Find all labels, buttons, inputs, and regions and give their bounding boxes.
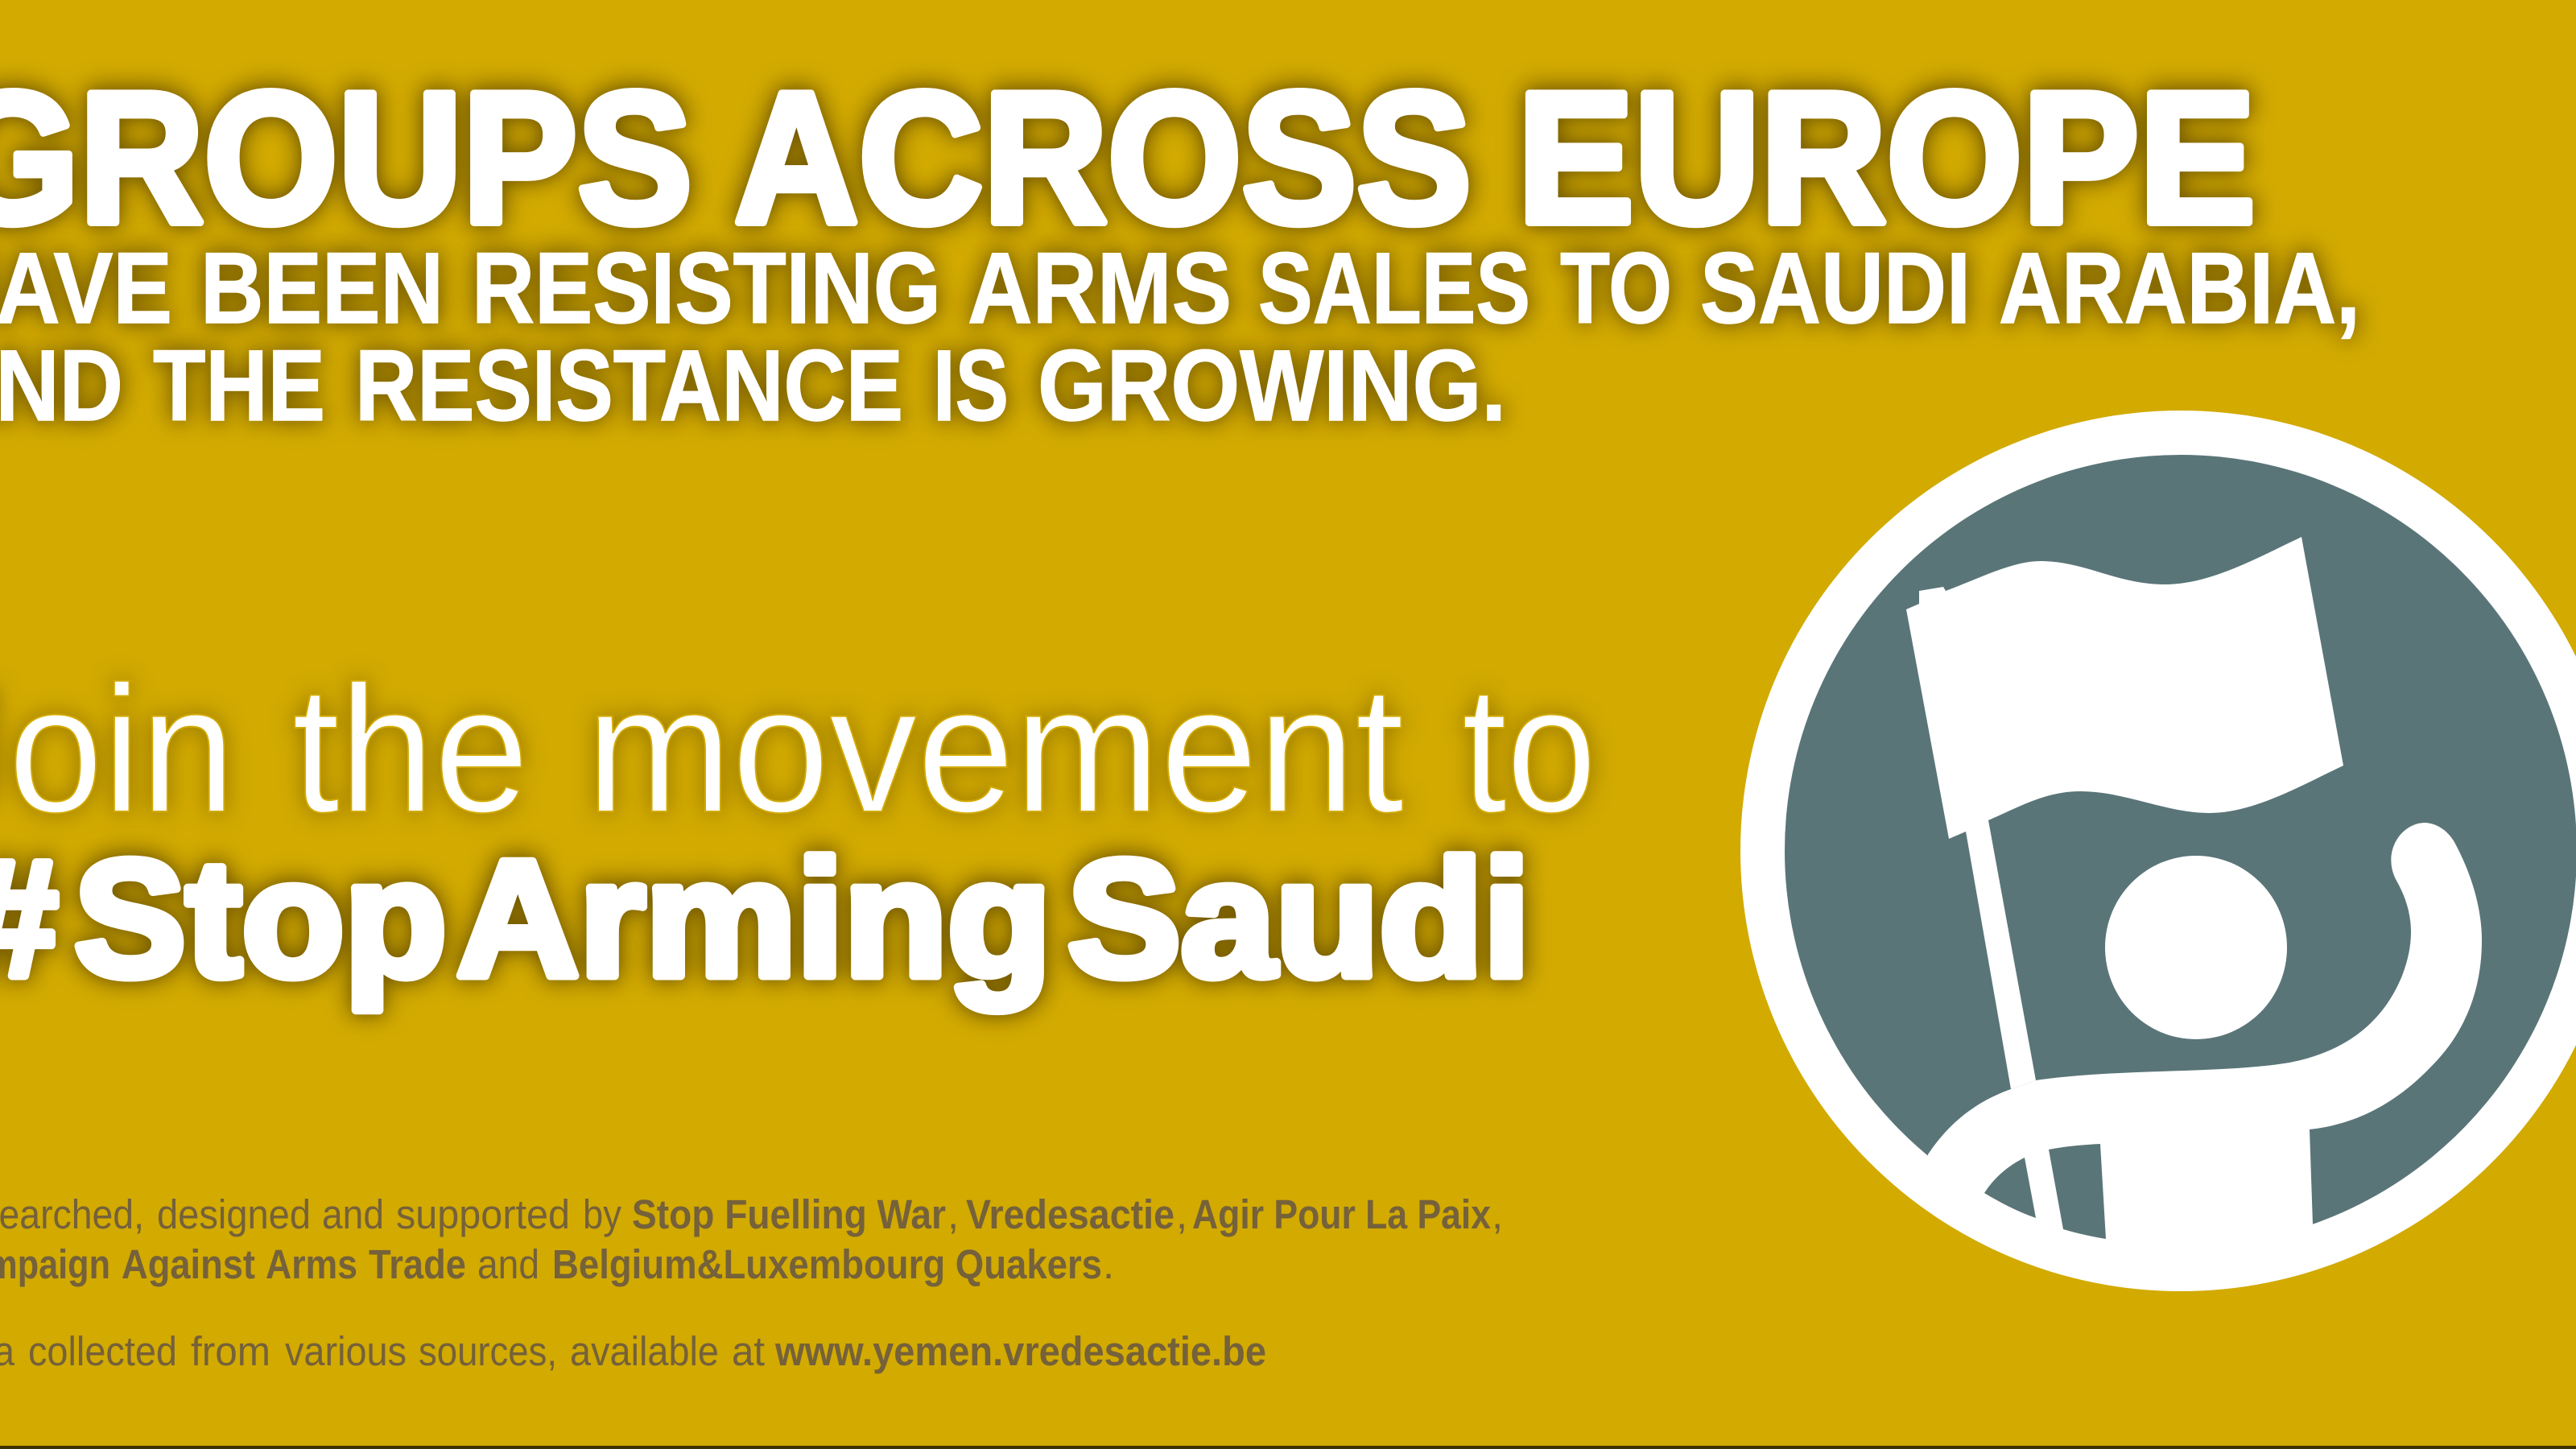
subtitle: resisting arms sales: SAUDI — [1700, 233, 1971, 345]
credits text: Against — [122, 1241, 255, 1287]
credits text: Arms — [266, 1241, 357, 1287]
credits text: sources, — [419, 1328, 557, 1374]
hashtag: Stop — [74, 826, 447, 1011]
credits text: supported — [396, 1191, 570, 1237]
credits text: and — [477, 1241, 539, 1287]
hashtag: Arming — [456, 826, 1051, 1011]
subtitle: resisting arms sales: RESISTING — [472, 233, 941, 345]
subtitle: resisting arms sales — [0, 233, 2360, 442]
subtitle: resisting arms sales: GROWING. — [1038, 330, 1506, 442]
subtitle: resisting arms sales: RESISTANCE — [355, 330, 903, 442]
hashtag — [0, 826, 1530, 1011]
credits text: from — [191, 1328, 270, 1374]
credits text: Stop Fuelling War — [632, 1191, 946, 1237]
subtitle: resisting arms sales: BEEN — [200, 233, 444, 345]
credits text: collected — [28, 1328, 177, 1374]
subtitle: resisting arms sales: TO — [1560, 233, 1672, 345]
call to action: join the movement: to — [1462, 649, 1596, 850]
credits text: Belgium&Luxembourg Quakers — [552, 1241, 1102, 1287]
credits text: and — [322, 1191, 384, 1237]
credits text: designed — [157, 1191, 311, 1237]
credits text: , — [1176, 1191, 1187, 1237]
credits text: . — [1103, 1241, 1114, 1287]
credits text: various — [285, 1328, 407, 1374]
bottom edge strip — [0, 1446, 2576, 1449]
icon: flag and pole — [1906, 537, 2343, 1089]
call to action: join the movement: movement — [586, 649, 1404, 850]
credits text: , — [1492, 1191, 1503, 1237]
call to action: join the movement: the — [292, 649, 529, 850]
credits text: at — [732, 1328, 765, 1374]
title: groups across Europe: ACROSS — [734, 54, 1472, 262]
credits text: , — [947, 1191, 959, 1237]
subtitle: resisting arms sales: ARMS — [968, 233, 1232, 345]
icon: protester with flag in circle — [1740, 411, 2576, 1291]
subtitle: resisting arms sales: IS — [933, 330, 1009, 442]
icon: body cutouts — [1984, 1144, 2106, 1239]
icon: body and raised arm — [1916, 823, 2482, 1272]
credits text: Agir Pour La Paix — [1192, 1191, 1491, 1237]
credits text: by — [583, 1191, 621, 1237]
credits text: available — [570, 1328, 719, 1374]
credits text: www.yemen.vredesactie.be — [774, 1328, 1266, 1374]
subtitle: resisting arms sales: ARABIA, — [1999, 233, 2360, 345]
icon: head — [2105, 856, 2287, 1039]
credits text: Trade — [369, 1241, 466, 1287]
credits text: Vredesactie — [966, 1191, 1174, 1237]
subtitle: resisting arms sales: SALES — [1258, 233, 1530, 345]
title: groups across Europe — [0, 54, 2256, 262]
title: groups across Europe: EUROPE — [1517, 54, 2256, 262]
hashtag: Saudi — [1067, 826, 1530, 1011]
credits text — [0, 1191, 1503, 1374]
call to action: join the movement — [0, 649, 1596, 850]
subtitle: resisting arms sales: THE — [153, 330, 325, 442]
